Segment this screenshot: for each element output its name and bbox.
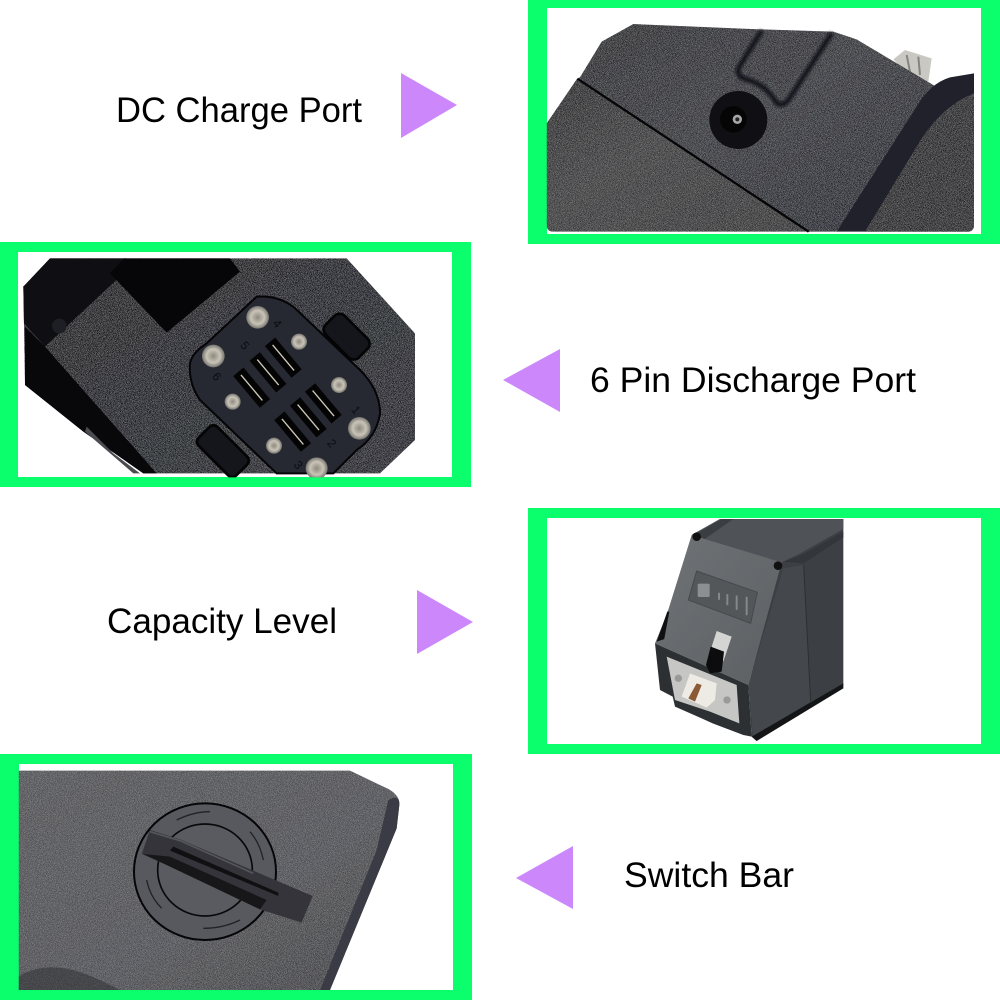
green frame: switch bar (0, 754, 472, 1000)
label: DC Charge Port: DC Charge Port (116, 91, 362, 130)
pin numbers: 4 (270, 317, 285, 331)
photo: 6 pin connector plate (23, 258, 415, 479)
green frame: DC charge port (528, 0, 1000, 244)
arrow: right to capacity level (417, 590, 473, 654)
capacity indicator window (688, 571, 757, 623)
screws (202, 306, 371, 479)
arrow: right to DC charge port (401, 73, 457, 138)
recessed cut-out above socket (738, 31, 832, 104)
connector plate (190, 296, 380, 473)
photo: battery end with capacity indicator (655, 519, 843, 741)
label: Capacity Level: Capacity Level (107, 602, 337, 641)
label: 6 Pin Discharge Port: 6 Pin Discharge Port (590, 361, 916, 400)
photo: rotary switch bar (19, 771, 399, 990)
pin numbers: 2 (324, 436, 339, 451)
pin numbers: 5 (237, 338, 253, 353)
green frame: discharge port (0, 242, 471, 487)
oblong mounting holes (195, 311, 373, 479)
photo: DC charge port on battery casing (547, 24, 974, 232)
pin numbers: 6 (209, 370, 224, 384)
green frame: capacity level (528, 508, 1000, 754)
pin numbers (213, 322, 360, 469)
arrow: left to switch bar (516, 846, 573, 909)
latch (706, 631, 732, 673)
switch dial (134, 803, 276, 940)
pin numbers: 1 (348, 403, 364, 417)
panel: switch bar photo (0, 754, 472, 1000)
arrow: left to discharge port (503, 349, 560, 412)
slots and pins (233, 338, 342, 452)
switch lever (142, 830, 313, 923)
metal plate and terminal (667, 657, 739, 723)
panel: 6 pin discharge port photo (0, 242, 471, 487)
label: Switch Bar: Switch Bar (624, 856, 794, 895)
icon: round DC socket (709, 91, 767, 149)
pin numbers: 3 (291, 458, 306, 472)
panel: DC charge port photo (528, 0, 1000, 244)
panel: capacity level photo (528, 508, 1000, 754)
